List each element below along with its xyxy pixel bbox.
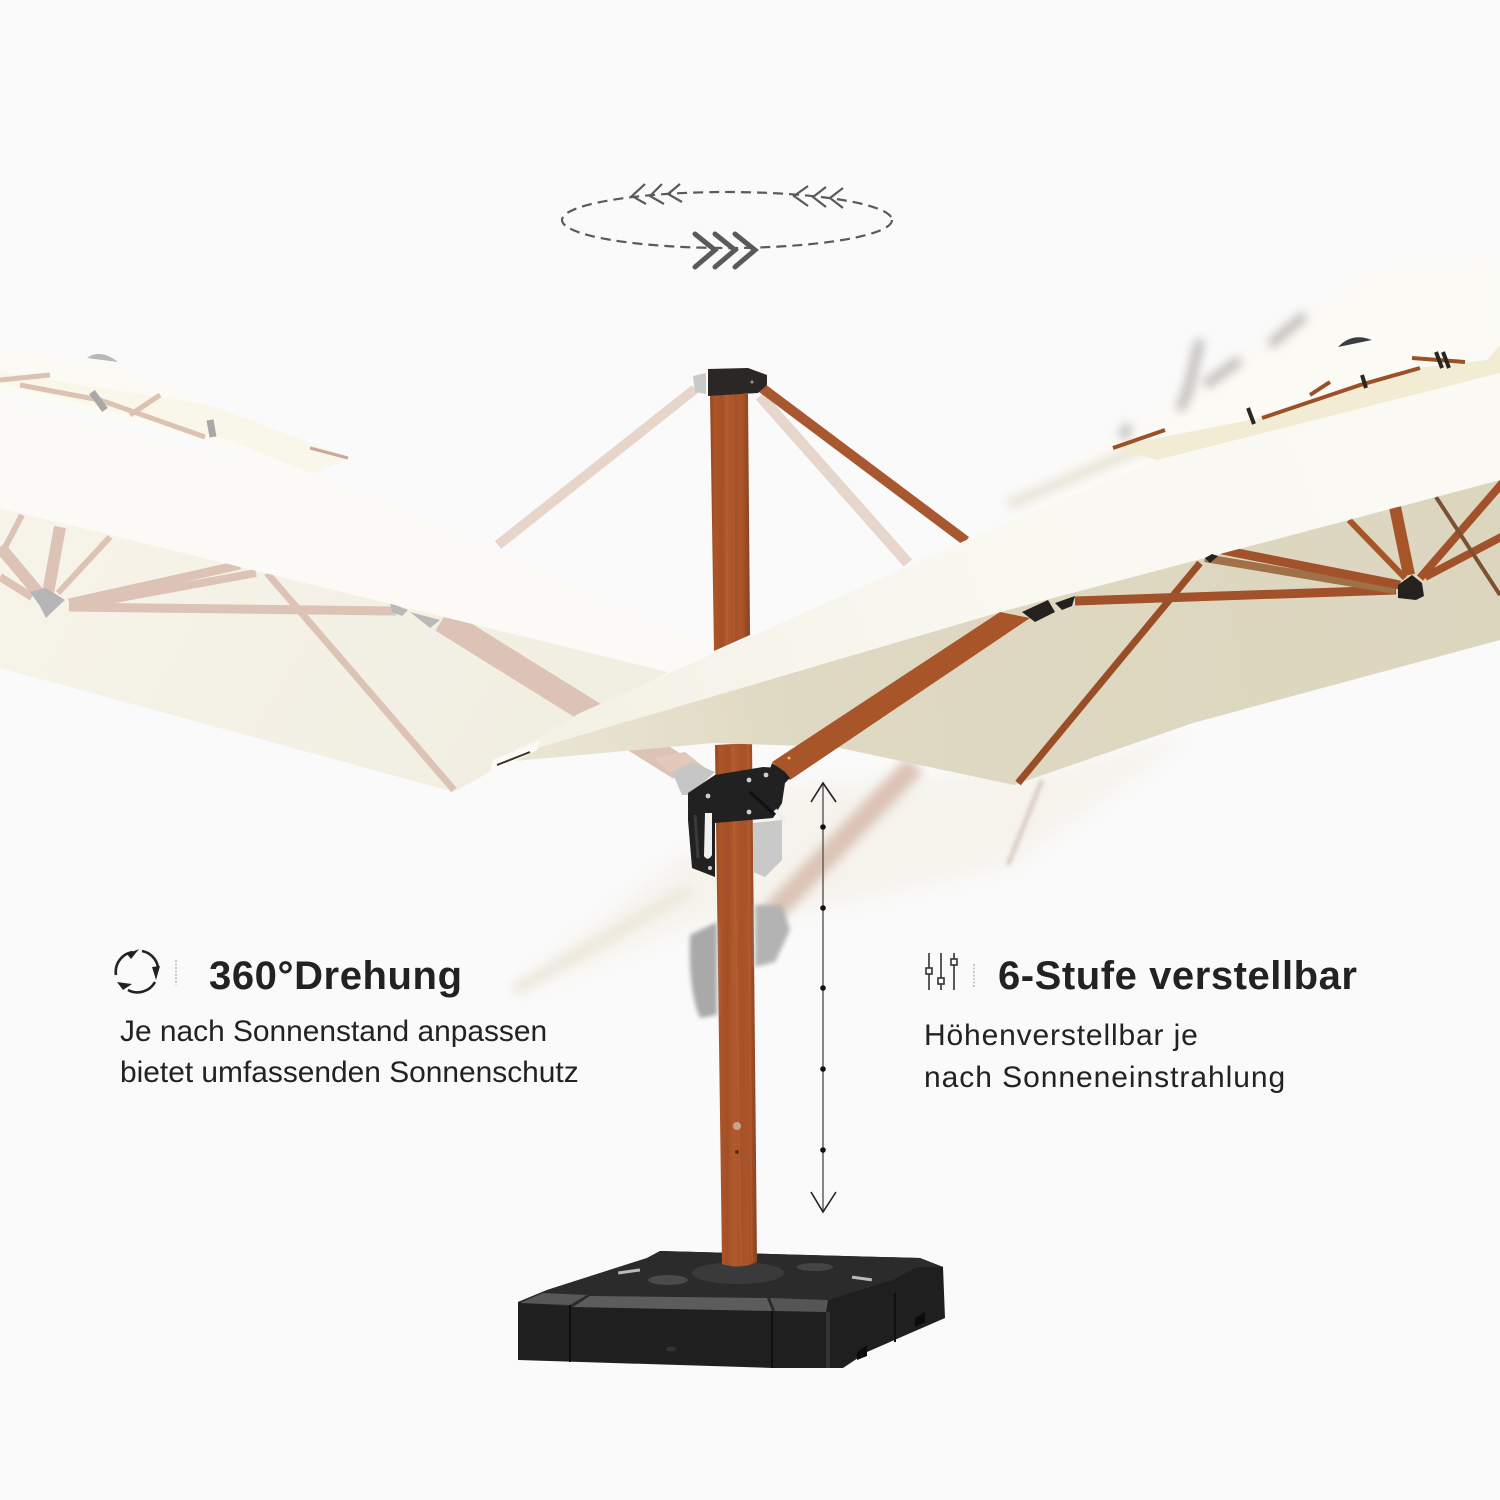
heading: 6-step adjustable: 6-Stufe verstellbar (998, 954, 1357, 998)
feature: 6-step height (924, 953, 1357, 1094)
right rib brackets and rib hub (1022, 554, 1424, 622)
rotation indicator ring (562, 184, 892, 267)
left canopy underside and ribs (faded) (0, 508, 680, 792)
right canopy underside (493, 480, 1500, 785)
left canopy vent (faded) (0, 352, 350, 474)
text: height description: Höhenverstellbar je (924, 1019, 1199, 1052)
pole top cap (708, 368, 767, 396)
tilt hub (688, 756, 790, 877)
ghost canopy: blurred lower (510, 735, 1190, 995)
icon: rotation arrows (116, 949, 160, 992)
heading: 360 rotation: 360°Drehung (209, 954, 462, 998)
height adjustment arrow with six stops (811, 783, 836, 1212)
right canopy ribs (772, 480, 1500, 783)
right canopy hem tip (490, 740, 540, 772)
text: rotation description: Je nach Sonnenstand anpassen (120, 1015, 547, 1048)
umbrella pole (710, 394, 757, 1267)
icon: sliders (926, 953, 957, 990)
text: rotation description: bietet umfassenden Sonnenschutz (120, 1056, 579, 1089)
ghost canopy: blurred back right (1005, 255, 1500, 510)
base stand (518, 1251, 945, 1368)
upper support struts (498, 373, 966, 563)
feature: 360 rotation (116, 949, 579, 1089)
right canopy top surface (493, 373, 1500, 763)
right canopy vent (1112, 332, 1500, 460)
ghost hub: faded rotated bracket (654, 752, 790, 1018)
text: height description: nach Sonneneinstrahlung (924, 1061, 1286, 1094)
left canopy top surface (0, 400, 716, 672)
